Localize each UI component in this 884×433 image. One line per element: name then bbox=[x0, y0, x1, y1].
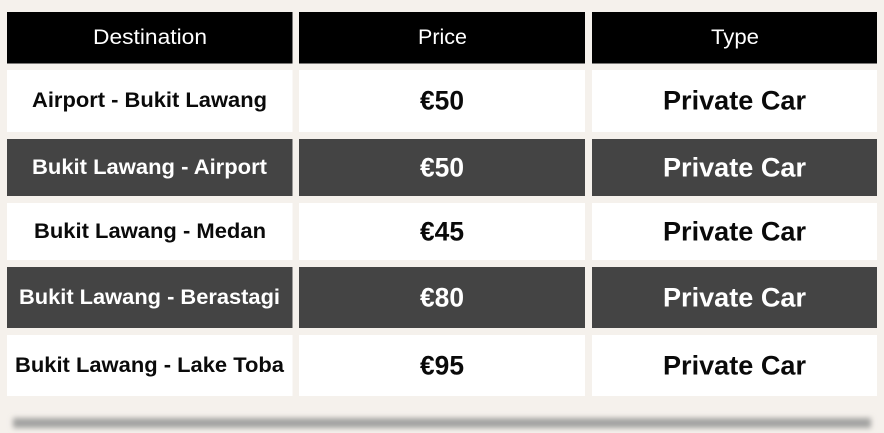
row: Bukit Lawang - Berastagi bbox=[7, 267, 877, 328]
blurred shadow bar bbox=[13, 418, 871, 428]
header: Type bbox=[592, 12, 877, 64]
row: Bukit Lawang - Lake Toba bbox=[7, 335, 877, 396]
row: Airport - Bukit Lawang bbox=[7, 70, 877, 132]
row: Bukit Lawang - Medan: Bukit Lawang - Medan bbox=[34, 220, 266, 243]
row: Bukit Lawang - Lake Toba: Private Car bbox=[663, 350, 806, 380]
row: Bukit Lawang - Lake Toba: €95 bbox=[420, 350, 464, 380]
header: Price: Price bbox=[418, 26, 467, 49]
row: Bukit Lawang - Berastagi: Bukit Lawang - Berastagi bbox=[19, 286, 280, 309]
row: Bukit Lawang - Lake Toba: Bukit Lawang - Lake Toba bbox=[15, 354, 284, 377]
row: Bukit Lawang - Airport: Bukit Lawang - Airport bbox=[32, 156, 267, 179]
row: Bukit Lawang - Berastagi: €80 bbox=[420, 282, 464, 312]
row: Bukit Lawang - Medan: €45 bbox=[420, 216, 464, 246]
row: Bukit Lawang - Berastagi: Private Car bbox=[663, 282, 806, 312]
row: Bukit Lawang - Medan: Private Car bbox=[663, 216, 806, 246]
row: Airport - Bukit Lawang: Private Car bbox=[663, 86, 806, 116]
row: Bukit Lawang - Airport bbox=[7, 139, 877, 196]
row: Airport - Bukit Lawang: €50 bbox=[420, 86, 464, 116]
row: Airport - Bukit Lawang: Airport - Bukit Lawang bbox=[32, 89, 267, 112]
header: Destination: Destination bbox=[93, 26, 207, 49]
table header row bbox=[7, 12, 877, 64]
row: Bukit Lawang - Airport: Private Car bbox=[663, 152, 806, 182]
header: Type: Type bbox=[711, 26, 759, 49]
row: Bukit Lawang - Airport: €50 bbox=[420, 152, 464, 182]
header: Destination bbox=[7, 12, 292, 64]
row: Bukit Lawang - Medan bbox=[7, 203, 877, 260]
header: Price bbox=[299, 12, 585, 64]
